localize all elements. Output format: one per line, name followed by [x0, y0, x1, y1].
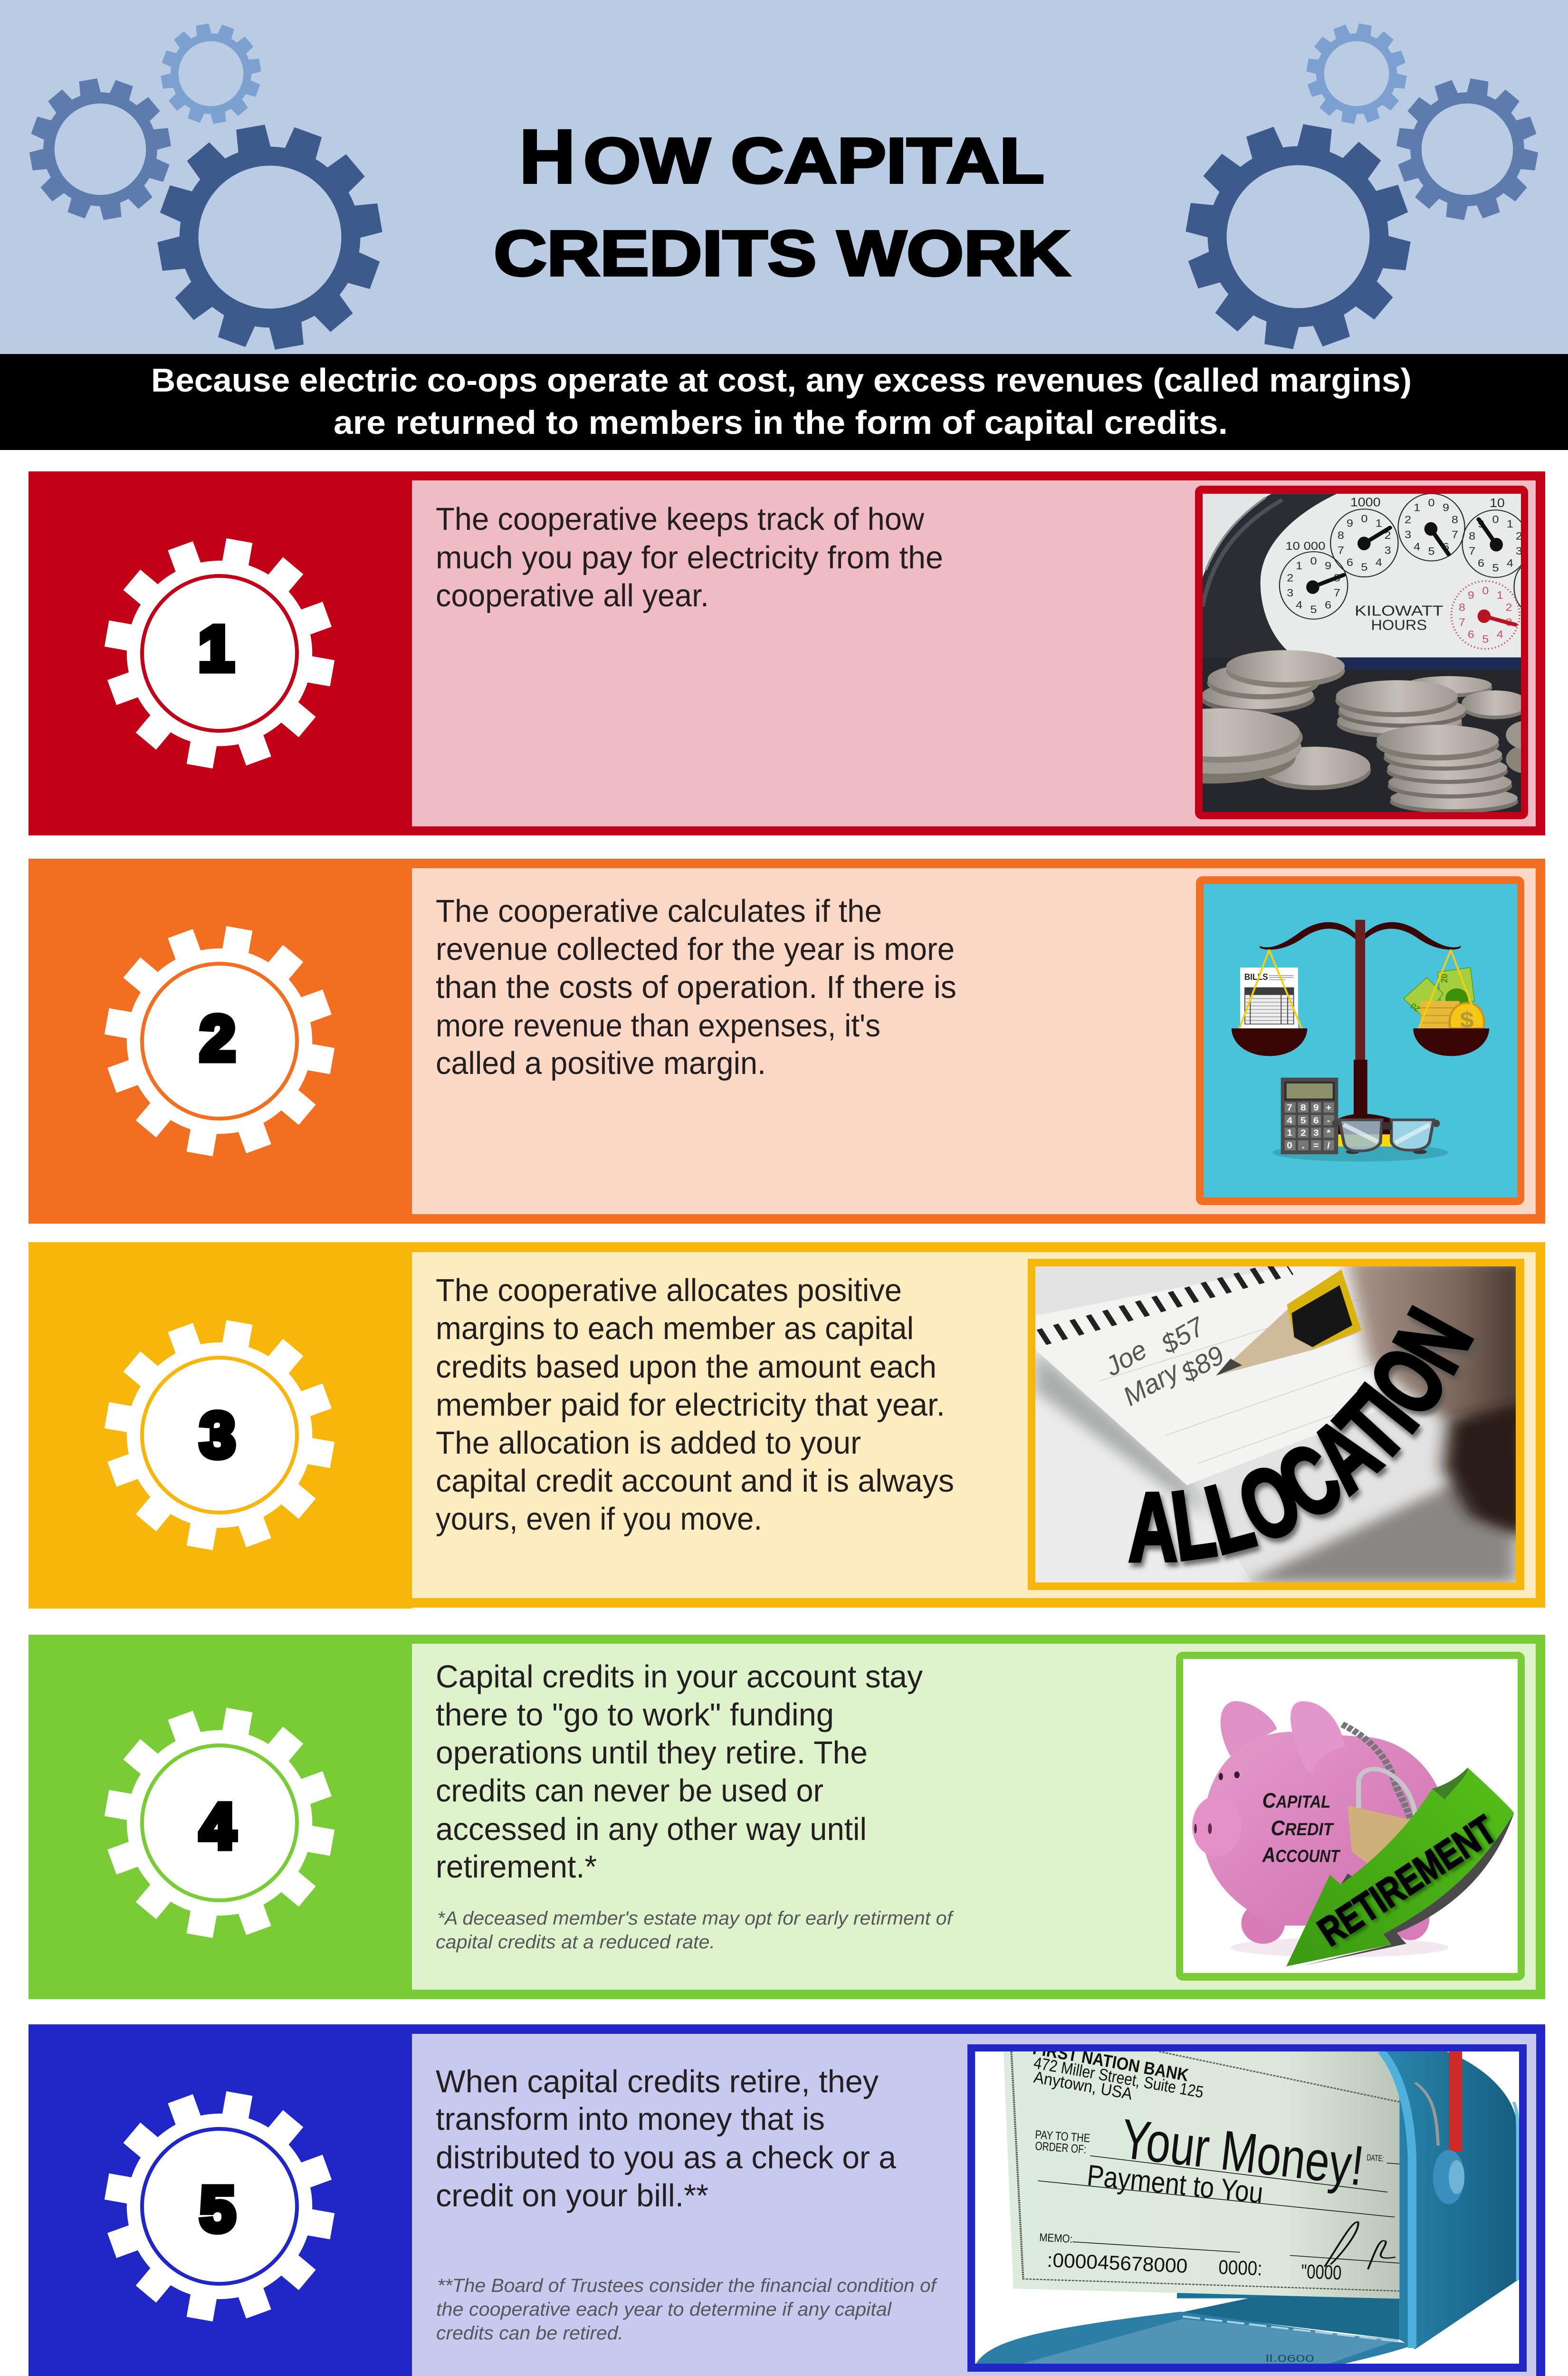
text block: step 4 — [436, 1659, 923, 1885]
icon: medium gear, left — [19, 68, 182, 230]
text block: step 1 — [436, 501, 943, 613]
icon: gear with number 1: 1 — [199, 613, 234, 684]
icon: gear with number 4: 4 — [200, 1791, 235, 1862]
photo frame: allocation notepad: $89 — [1176, 1340, 1229, 1388]
photo frame: check in a mailbox: ll.0600 — [1265, 2353, 1314, 2364]
text block: step 3: credits based upon the amount each — [436, 1349, 937, 1385]
subtitle band: Because electric co-ops operate at cost, any excess revenues (called margins) — [151, 362, 1412, 399]
panel: step 2 — [29, 859, 1545, 1224]
text block: step 2: more revenue than expenses, it's — [436, 1008, 880, 1044]
icon: gear with number 5: 5 — [200, 2174, 235, 2245]
photo frame: piggy bank with retirement arrow: CREDIT — [1271, 1816, 1334, 1840]
photo frame: meter and coins: 10 000 — [1285, 539, 1325, 553]
photo frame: balance scale with bills and money: 20 — [1408, 1001, 1422, 1014]
text block: step 4: operations until they retire. The — [436, 1735, 868, 1771]
photo frame: check in a mailbox: ORDER OF: — [1035, 2139, 1087, 2156]
text block: step 5: distributed to you as a check or a — [436, 2140, 897, 2175]
photo frame: check in a mailbox — [967, 2039, 1527, 2372]
photo frame: balance scale with bills and money — [1196, 876, 1524, 1205]
subtitle band: are returned to members in the form of capital credits. — [334, 404, 1228, 441]
title: OW CAPITAL — [583, 125, 1044, 197]
icon: large gear, right — [1169, 107, 1427, 366]
photo frame: meter and coins: KILOWATT — [1355, 603, 1444, 619]
subtitle band — [0, 354, 1568, 450]
photo frame: balance scale with bills and money: 123* — [1287, 1128, 1331, 1138]
text block: step 3 — [436, 1273, 954, 1537]
footnote: step 5: the cooperative each year to determine if any capital — [436, 2299, 892, 2320]
footnote: step 4 — [436, 1908, 954, 1953]
icon: small gear, right — [1299, 16, 1415, 132]
text block: step 4: accessed in any other way until — [436, 1811, 867, 1847]
photo frame: meter and coins: 0987654321 — [1287, 555, 1340, 616]
icon: large gear, left — [141, 108, 399, 366]
text block: step 2: called a positive margin. — [436, 1045, 766, 1081]
text block: step 1: cooperative all year. — [436, 578, 709, 613]
photo frame: balance scale with bills and money: 20 — [1439, 974, 1449, 983]
text block: step 3: yours, even if you move. — [436, 1501, 762, 1537]
footnote: step 4: capital credits at a reduced rate. — [436, 1932, 715, 1953]
text block: step 3: capital credit account and it is always — [436, 1463, 954, 1499]
icon: gear with number 1 — [87, 521, 352, 786]
text block: step 5: When capital credits retire, they — [436, 2064, 879, 2099]
title: H — [519, 114, 575, 199]
footnote: step 4: *A deceased member's estate may opt for early retirment of — [437, 1908, 954, 1929]
text block: step 2: than the costs of operation. If there is — [436, 969, 956, 1005]
text block: step 3: The allocation is added to your — [436, 1425, 861, 1461]
photo frame: meter and coins: 0987654321 — [1405, 497, 1458, 557]
title: CREDITS WORK — [494, 218, 1070, 289]
footnote: step 5: credits can be retired. — [436, 2323, 623, 2344]
icon: gear with number 5 — [87, 2074, 352, 2339]
title — [494, 114, 1070, 289]
icon: gear with number 2: 2 — [200, 1003, 235, 1074]
photo frame: check in a mailbox: 0000: — [1218, 2256, 1262, 2280]
text block: step 3: margins to each member as capital — [436, 1311, 914, 1346]
icon: gear with number 3: 3 — [200, 1400, 235, 1471]
photo frame: piggy bank with retirement arrow: ACCOUNT — [1262, 1843, 1341, 1867]
photo frame: meter and coins: 10 — [1490, 496, 1505, 510]
panel: step 5 — [29, 2024, 1545, 2376]
photo frame: piggy bank with retirement arrow — [1176, 1652, 1525, 1981]
icon: gear with number 4 — [87, 1690, 352, 1955]
photo frame: allocation notepad — [1028, 1259, 1529, 1590]
text block: step 4: there to "go to work" funding — [436, 1697, 834, 1733]
text block: step 1: The cooperative keeps track of how — [436, 501, 925, 537]
photo frame: balance scale with bills and money: 0.=/ — [1287, 1141, 1330, 1150]
photo frame: balance scale with bills and money: 789+ — [1287, 1103, 1331, 1113]
photo frame: allocation notepad: Mary — [1118, 1355, 1185, 1411]
panel: step 3 — [29, 1242, 1545, 1609]
photo frame: balance scale with bills and money: BILLS — [1244, 972, 1268, 982]
photo frame: allocation notepad: Joe — [1100, 1334, 1152, 1382]
photo frame: piggy bank with retirement arrow: RETIREMENT — [1310, 1807, 1504, 1954]
photo frame: check in a mailbox: Your Money! — [1118, 2108, 1367, 2198]
text block: step 4: Capital credits in your account stay — [436, 1659, 923, 1695]
photo frame: check in a mailbox: PAY TO THE — [1035, 2128, 1090, 2145]
text block: step 4: credits can never be used or — [436, 1773, 823, 1809]
icon: gear with number 2 — [87, 909, 352, 1174]
photo frame: check in a mailbox: Payment to You — [1086, 2159, 1265, 2210]
photo frame: balance scale with bills and money: $ — [1460, 1007, 1474, 1033]
photo frame: balance scale with bills and money: 456- — [1287, 1116, 1330, 1126]
photo frame: check in a mailbox: MEMO: — [1039, 2231, 1073, 2246]
photo frame: allocation notepad: ALLOCATION — [1128, 1293, 1492, 1582]
photo frame: piggy bank with retirement arrow: CAPITAL — [1262, 1789, 1330, 1812]
text block: step 2 — [436, 893, 956, 1081]
photo frame: meter and coins: 0123456789 — [1459, 585, 1512, 645]
icon: gear with number 3 — [87, 1303, 352, 1568]
photo frame: check in a mailbox: Anytown, USA — [1033, 2068, 1134, 2103]
photo frame: check in a mailbox: FIRST NATION BANK — [1032, 2039, 1190, 2085]
photo frame: meter and coins: 1000 — [1350, 495, 1381, 509]
text block: step 5: transform into money that is — [436, 2101, 825, 2137]
text block: step 2: The cooperative calculates if the — [436, 893, 882, 929]
panel: step 4 — [29, 1635, 1545, 1999]
header band — [0, 0, 1568, 366]
photo frame: allocation notepad: $57 — [1156, 1311, 1210, 1360]
photo frame: check in a mailbox: "0000 — [1301, 2260, 1342, 2284]
footnote: step 5: **The Board of Trustees consider the financial condition of — [437, 2275, 938, 2296]
text block: step 5 — [436, 2064, 897, 2213]
text block: step 3: The cooperative allocates positive — [436, 1273, 902, 1308]
text block: step 3: member paid for electricity that year. — [436, 1387, 945, 1423]
photo frame: check in a mailbox: 472 Miller Street, Suite 125 — [1033, 2053, 1205, 2102]
text block: step 5: credit on your bill.** — [436, 2178, 708, 2213]
panel: step 1 — [29, 471, 1549, 835]
photo frame: meter and coins: 0123456789 — [1338, 513, 1391, 573]
photo frame: meter and coins: 0123456789 — [1469, 514, 1522, 574]
photo frame: check in a mailbox: :000045678000 — [1047, 2249, 1188, 2277]
photo frame: meter and coins — [1195, 486, 1528, 819]
footnote: step 5 — [436, 2275, 938, 2344]
photo frame: check in a mailbox: DATE: — [1367, 2153, 1384, 2164]
icon: medium gear, right — [1386, 68, 1549, 230]
text block: step 2: revenue collected for the year is more — [436, 931, 955, 967]
text block: step 4: retirement.* — [436, 1849, 597, 1885]
icon: small gear, left — [153, 16, 269, 132]
text block: step 1: much you pay for electricity from the — [436, 540, 943, 575]
photo frame: meter and coins: HOURS — [1371, 617, 1427, 633]
